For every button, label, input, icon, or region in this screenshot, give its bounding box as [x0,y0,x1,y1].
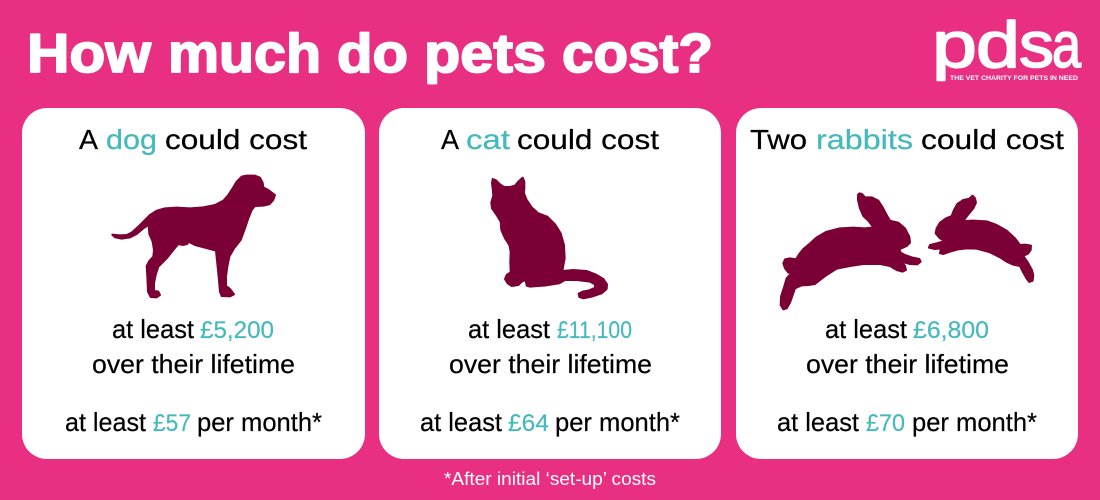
title [27,22,713,84]
cat monthly cost: £64 [508,410,549,437]
logo: pdsa: THE VET CHARITY FOR PETS IN NEED [950,75,1078,82]
dog heading: could cost [165,124,307,155]
rabbits monthly cost [777,407,1037,437]
cat heading: cat [466,124,510,155]
cat heading: could cost [517,124,659,155]
footnote: *After initial ‘set-up’ costs [444,469,656,489]
rabbits lifetime cost [825,314,989,344]
panel: rabbits [736,108,1078,459]
rabbits heading: rabbits [816,124,913,155]
cat lifetime cost: at least [468,314,551,344]
logo: pdsa [932,8,1082,82]
cat monthly cost: per month* [555,407,680,437]
icon: dog silhouette [112,176,275,297]
panel: dog [22,108,365,459]
logo: pdsa: s [1019,8,1054,81]
cat monthly cost [420,407,680,437]
cat heading: A [441,124,459,155]
icon: two rabbits silhouette [781,193,1033,309]
dog lifetime label: over their lifetime [92,349,295,379]
icon: cat silhouette [491,178,607,298]
dog heading: dog [106,124,157,155]
dog heading: A [79,124,98,155]
title: cost? [562,22,713,84]
rabbits monthly cost: at least [777,407,860,437]
rabbits lifetime label: over their lifetime [806,349,1009,379]
dog heading [79,124,307,155]
cat monthly cost: at least [420,407,503,437]
rabbits heading: could cost [921,124,1064,155]
dog monthly cost: £57 [153,410,191,437]
dog lifetime cost: at least [112,314,195,344]
panel: cat [379,108,721,459]
dog lifetime cost: £5,200 [200,317,274,344]
cat lifetime label: over their lifetime [449,349,652,379]
cat heading [441,124,659,155]
logo: pdsa: p [932,8,977,81]
logo: pdsa: d [976,8,1020,81]
dog lifetime cost [112,314,274,344]
cat lifetime cost [468,314,632,344]
rabbits heading [750,124,1064,155]
dog monthly cost [65,407,322,437]
title: much [168,22,321,84]
dog monthly cost: at least [65,407,147,437]
rabbits monthly cost: per month* [912,407,1037,437]
cat lifetime cost: £11,100 [557,317,632,344]
logo: pdsa: a [1052,8,1082,81]
title: How [27,22,151,84]
rabbits heading: Two [750,124,807,155]
rabbits lifetime cost: at least [825,314,908,344]
rabbits lifetime cost: £6,800 [913,317,989,344]
title: pets [424,22,546,84]
title: do [337,22,408,84]
rabbits monthly cost: £70 [866,410,905,437]
dog monthly cost: per month* [197,407,322,437]
